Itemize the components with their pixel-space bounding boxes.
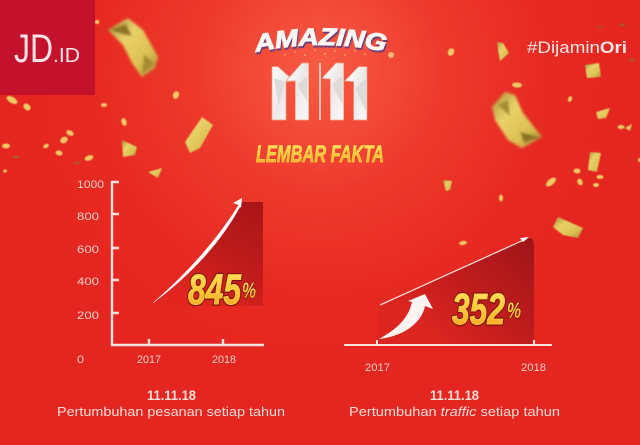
value 845%: 845 (188, 266, 242, 314)
axis (344, 340, 552, 345)
chart: order growth (77, 179, 264, 366)
heading: Lembar Fakta: LEMBAR FAKTA (256, 141, 384, 168)
y axis labels: 400 (77, 276, 99, 288)
logo: JD.ID: .ID (53, 45, 80, 67)
y axis labels (77, 179, 236, 366)
y axis labels: 0 (77, 354, 84, 366)
curved arrow (153, 198, 242, 303)
logo: JD.ID: JD (14, 27, 53, 71)
axis labels: 2018 (521, 362, 546, 374)
area under curve (153, 202, 263, 306)
logo: JD.ID (0, 0, 95, 95)
event logo: Amazing 11.11 (254, 28, 394, 120)
y axis labels: 1000 (77, 179, 104, 191)
caption: orders: 11.11.18 (147, 387, 196, 403)
y axis labels: 800 (77, 211, 99, 223)
axis labels: 2017 (365, 362, 390, 374)
caption: traffic: 11.11.18 (430, 387, 479, 403)
straight arrow (380, 237, 529, 305)
hashtag: #Dijamin Ori (527, 38, 627, 57)
caption: traffic: Pertumbuhan traffic setiap tahun (349, 404, 560, 419)
axes (112, 182, 264, 345)
caption: orders (57, 387, 285, 419)
axis labels (365, 362, 546, 374)
chart: traffic growth (344, 237, 552, 374)
y axis labels: 2018 (212, 354, 236, 366)
caption: orders: Pertumbuhan pesanan setiap tahun (57, 404, 285, 419)
sparkle arc (284, 45, 394, 58)
amazing word: AMAZING (254, 28, 387, 53)
white swoosh arrow (379, 294, 433, 339)
value 352%: % (507, 298, 521, 323)
11 11 numerals (272, 63, 367, 120)
value 845%: % (242, 278, 256, 303)
caption: traffic (349, 387, 560, 419)
value 845%: 845 (188, 266, 242, 314)
y axis labels: 2017 (137, 354, 161, 366)
area under line (378, 238, 534, 344)
y axis labels: 200 (77, 310, 99, 322)
confetti (2, 18, 640, 246)
amazing shadow: AMAZING (256, 30, 388, 55)
value 352%: 352 (452, 285, 505, 334)
value 352%: 352 (452, 285, 505, 334)
y axis labels: 600 (77, 244, 99, 256)
